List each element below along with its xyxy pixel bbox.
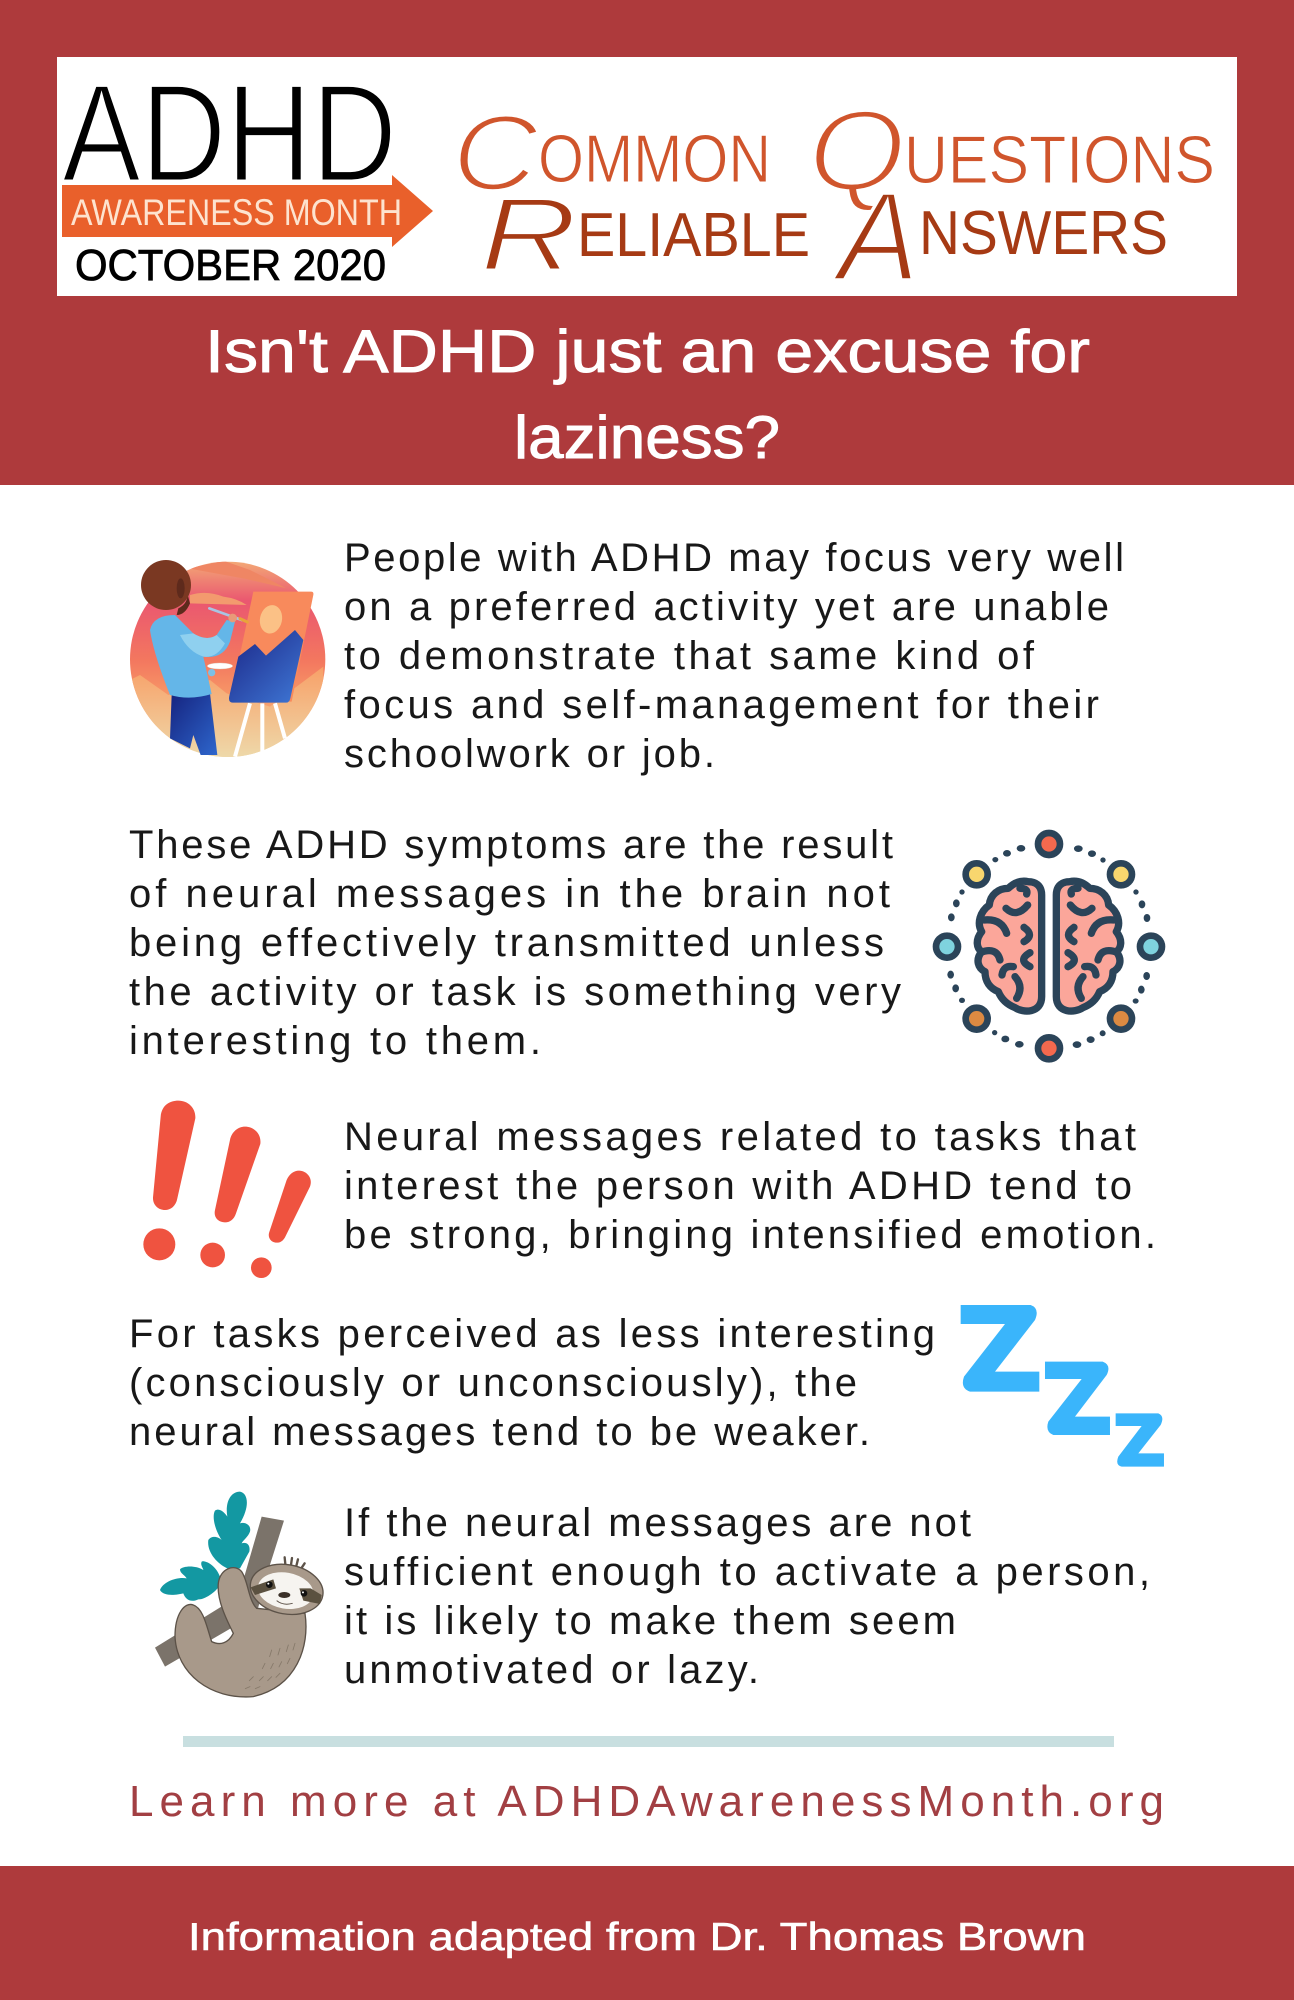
painter figure [141,560,247,755]
text block: neural messages: being effectively transmitted unless [129,921,884,965]
text block: preferred activity: focus and self-management for their [344,683,1099,727]
handwritten heading: Reliable Answers [480,166,1168,307]
text block: unmotivated or lazy [344,1501,1150,1692]
brain left hemisphere [977,881,1042,1011]
text block: neural messages: interesting to them. [129,1019,541,1063]
sloth face [251,1579,276,1595]
branch [155,1517,284,1667]
text block: weaker messages: neural messages tend to be weaker. [129,1410,870,1454]
call to action link: Learn more at ADHDAwarenessMonth.org [129,1777,1164,1826]
divider [183,1736,1114,1747]
text block: strong messages: interest the person with ADHD tend to [344,1164,1132,1208]
handwritten heading: Reliable Answers: NSWERS [919,199,1168,268]
ring dots [947,845,1150,1048]
icon: brain with nodes [936,833,1162,1059]
logo date: OCTOBER 2020 [75,241,386,290]
footer band [0,1866,1294,2000]
footer credit: Information adapted from Dr. Thomas Brown [188,1916,1086,1959]
icon: sleeping Zzz [961,1305,1164,1467]
icon: sloth on branch [155,1492,327,1697]
logo word ADHD: ADHD [62,56,397,211]
handwritten heading: Common Questions: OMMON [538,121,771,197]
text block: weaker messages [129,1312,935,1454]
text block: unmotivated or lazy: unmotivated or lazy. [344,1648,759,1692]
sloth fur [245,1643,295,1689]
handwritten heading: Reliable Answers: R [480,177,577,293]
handwritten heading: Common Questions [452,87,1215,215]
title: Isn't ADHD just an excuse for [205,318,1090,385]
sloth hair [285,1557,305,1569]
text block: unmotivated or lazy: If the neural messages are not [344,1501,971,1545]
icon: painter at easel [130,560,327,758]
handwritten heading: Common Questions: C [452,92,539,213]
text block: preferred activity: schoolwork or job. [344,732,715,776]
text block: preferred activity: on a preferred activity yet are unable [344,585,1109,629]
text block: preferred activity [344,536,1124,776]
icon: exclamation marks [143,1101,311,1278]
easel legs [235,703,285,757]
header banner [57,56,1237,307]
red header background [0,0,1294,485]
leaves [160,1492,250,1601]
text block: neural messages: These ADHD symptoms are the result [129,823,893,867]
text block: preferred activity: to demonstrate that same kind of [344,634,1035,678]
text block: weaker messages: For tasks perceived as less interesting [129,1312,935,1356]
sloth head [246,1559,327,1620]
text block: neural messages: the activity or task is something very [129,970,901,1014]
text block: neural messages: of neural messages in the brain not [129,872,890,916]
ADHD Awareness Month logo [62,56,433,290]
text block: weaker messages: (consciously or unconsciously), the [129,1361,857,1405]
sloth body [175,1568,306,1697]
text block: strong messages [344,1115,1156,1257]
node circles [936,833,1162,1059]
handwritten heading: Common Questions: Q [808,87,906,215]
orange arrow banner [62,175,433,247]
text block: unmotivated or lazy: it is likely to make them seem [344,1599,956,1643]
handwritten heading: Common Questions: UESTIONS [904,122,1215,198]
text block: strong messages: be strong, bringing intensified emotion. [344,1213,1156,1257]
text block: preferred activity: People with ADHD may focus very well [344,536,1124,580]
brain right hemisphere [1056,881,1121,1011]
handwritten heading: Reliable Answers: ELIABLE [577,201,810,270]
text block: neural messages [129,823,901,1063]
text block: strong messages: Neural messages related to tasks that [344,1115,1136,1159]
title: laziness? [514,404,780,471]
canvas [230,592,313,702]
title [205,318,1090,471]
arrow label: AWARENESS MONTH [71,192,402,233]
text block: unmotivated or lazy: sufficient enough to activate a person, [344,1550,1150,1594]
handwritten heading: Reliable Answers: A [831,166,919,307]
